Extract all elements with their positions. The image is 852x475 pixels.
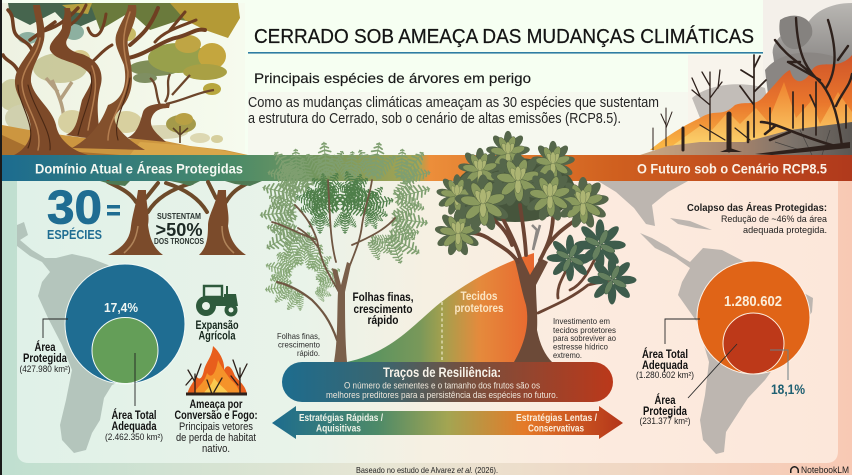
text: protected areas collapse: Colapso das Áreas Protegidas: <box>687 201 827 214</box>
arrow: strategies spectrum: Estratégias Rápidas / <box>299 413 383 424</box>
label: agricultural expansion <box>196 320 238 342</box>
arrow: strategies spectrum <box>272 406 623 439</box>
label: protected area right: Protegida <box>643 406 687 418</box>
text: conversion and fire threat: Principais vetores <box>179 421 253 433</box>
label: thin leaves bold: crescimento <box>354 302 412 316</box>
label: 18.1 percent: 18,1% <box>771 382 805 397</box>
label: thin leaves bold <box>352 290 414 327</box>
stat: 30 species <box>47 180 120 242</box>
label: total suitable area right: (1.280.602 km²) <box>636 370 694 380</box>
text: protected areas collapse: Redução de ~46% da área <box>721 214 828 225</box>
illustration: thick-leaved tree <box>434 131 636 362</box>
callout: resilience traits: melhores preditores para a persistência das espécies no futuro. <box>326 390 558 401</box>
label: protected area right <box>640 344 737 426</box>
arrow: strategies spectrum: Conservativas <box>528 424 584 434</box>
label: thin leaves small: crescimento <box>278 340 320 350</box>
label: protective tissue investment <box>553 316 616 360</box>
label: thin leaves bold: rápido <box>368 313 398 327</box>
label: agricultural expansion: Agrícola <box>198 330 236 342</box>
label: protected area left: (427.980 km²) <box>20 364 70 374</box>
label: thin leaves small <box>277 331 320 358</box>
label: protective tissue investment: estresse hídrico <box>553 342 608 352</box>
text: conversion and fire threat <box>174 399 258 455</box>
chart: right nested circles <box>697 261 810 374</box>
chart: growth strategy curve <box>347 253 534 362</box>
label: total suitable area left: Área Total <box>112 409 156 422</box>
band: current domain: Domínio Atual e Áreas Protegidas <box>35 160 243 176</box>
label: protected area left <box>20 319 70 374</box>
label: protected area right: Área <box>654 394 676 407</box>
label: thin leaves bold: Folhas finas, <box>352 290 414 304</box>
illustration: thin-leaved tree <box>255 137 441 362</box>
chart: left nested circles: 17,4% <box>104 300 138 315</box>
callout: resilience traits <box>282 362 613 402</box>
text: conversion and fire threat: Ameaça por <box>190 399 243 411</box>
label: protected area left: Área <box>34 341 56 354</box>
label: protective tissue investment: extremo. <box>553 350 582 360</box>
text: conversion and fire threat: Conversão e Fogo: <box>174 410 258 422</box>
callout: resilience traits: O número de sementes e o tamanho dos frutos são os <box>344 380 540 392</box>
band: current domain <box>2 155 852 181</box>
text: protected areas collapse <box>687 201 828 236</box>
label: total suitable area right: Adequada <box>642 360 688 372</box>
arrow: strategies spectrum: Aquisitivas <box>316 424 361 434</box>
map: North and South America right <box>598 181 813 454</box>
chart: left nested circles <box>65 264 185 384</box>
label: protective tissue investment: tecidos protetores <box>553 325 616 335</box>
illustration: cerrado trees <box>0 3 248 155</box>
label: protective tissue: Tecidos <box>460 289 498 303</box>
footer: source: Baseado no estudo de Alvarez et al. (2026). <box>356 465 498 475</box>
panel: background <box>0 181 852 475</box>
label: total suitable area left: Adequada <box>112 421 157 433</box>
stat: 30 species: ESPÉCIES <box>47 227 102 242</box>
icon: trees with percentage: SUSTENTAM <box>157 211 201 221</box>
label: agricultural expansion: Expansão <box>196 320 238 332</box>
callout: resilience traits: Traços de Resiliência: <box>383 365 501 380</box>
text: conversion and fire threat: de perda de habitat <box>176 432 256 444</box>
label: protective tissue investment: Investimento em <box>553 316 610 326</box>
icon: trees with percentage: >50% <box>156 220 202 240</box>
label: protected area left: Protegida <box>23 353 67 365</box>
label: protective tissue investment: para sobreviver ao <box>553 333 616 343</box>
label: total suitable area left <box>105 353 163 442</box>
title: CERRADO SOB AMEAÇA DAS MUDANÇAS CLIMÁTICAS <box>254 25 754 48</box>
intro text: Como as mudanças climáticas ameaçam as 30 espécies que sustentam <box>248 95 659 111</box>
icon: tractor <box>196 286 238 316</box>
band heading: future: O Futuro sob o Cenário RCP8.5 <box>637 160 827 176</box>
intro text: a estrutura do Cerrado, sob o cenário de altas emissões (RCP8.5). <box>248 111 621 127</box>
subtitle: Principais espécies de árvores em perigo <box>254 70 531 86</box>
label: thin leaves small: Folhas finas, <box>277 331 320 341</box>
label: protective tissue: protetores <box>454 301 504 315</box>
text: protected areas collapse: adequada protegida. <box>743 225 827 236</box>
icon: fire <box>186 346 247 396</box>
label: protective tissue <box>454 289 504 315</box>
label: total suitable area right <box>636 319 700 380</box>
chart: right nested circles: 1.280.602 <box>724 294 782 310</box>
intro text <box>248 95 659 127</box>
label: 18.1 percent <box>770 350 805 397</box>
label: total suitable area right: Área Total <box>642 348 688 361</box>
label: protected area right: (231.377 km²) <box>640 416 690 426</box>
text: conversion and fire threat: nativo. <box>202 443 230 455</box>
icon: trees with percentage: DOS TRONCOS <box>154 237 205 246</box>
label: thin leaves small: rápido. <box>297 348 320 358</box>
map: South America left <box>17 222 130 453</box>
arrow: strategies spectrum: Estratégias Lentas / <box>516 413 597 424</box>
label: total suitable area left: (2.462.350 km²) <box>105 432 163 442</box>
stat: 30 species: 30 <box>47 180 102 234</box>
illustration: burning cerrado <box>640 3 852 155</box>
icon: trees with percentage <box>100 181 262 255</box>
